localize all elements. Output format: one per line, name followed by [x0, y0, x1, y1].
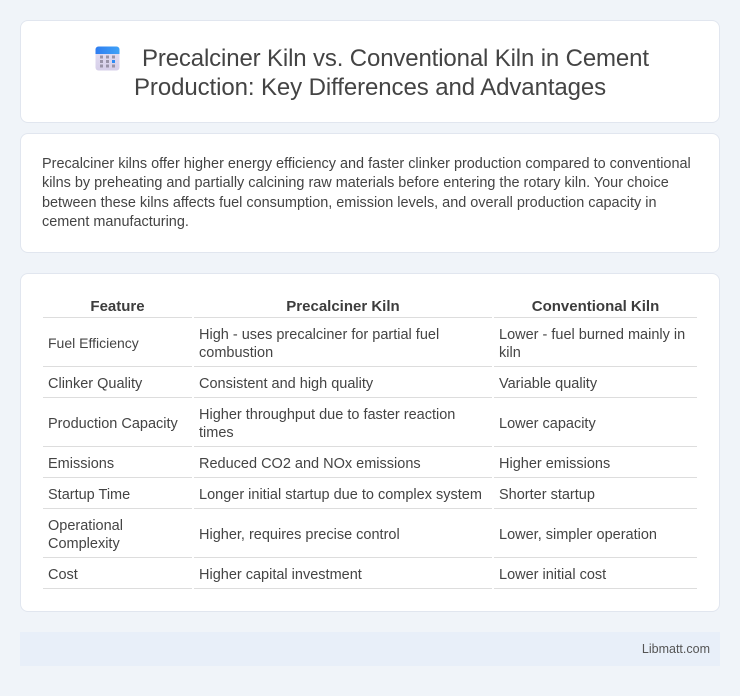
comparison table: Variable quality	[499, 376, 597, 392]
comparison table: Clinker Quality	[48, 376, 142, 392]
comparison table: Feature	[90, 298, 145, 315]
footer credit: Libmatt.com	[642, 642, 710, 656]
comparison table: Higher capital investment	[199, 567, 362, 583]
comparison table: Lower, simpler operation	[499, 527, 657, 543]
comparison table: Longer initial startup due to complex system	[199, 487, 482, 503]
comparison table: Operational	[48, 518, 123, 534]
header card	[20, 20, 720, 123]
intro card	[20, 133, 720, 253]
comparison table: Reduced CO2 and NOx emissions	[199, 456, 421, 472]
intro text: cement manufacturing.	[42, 214, 189, 230]
table card	[20, 273, 720, 612]
comparison table: Conventional Kiln	[532, 298, 659, 315]
intro text	[42, 156, 691, 230]
intro text: kilns by preheating and partially calcining raw materials before entering the rotary kiln. Your choice	[42, 175, 669, 191]
comparison table: Consistent and high quality	[199, 376, 373, 392]
comparison table: Lower - fuel burned mainly in	[499, 327, 685, 343]
comparison table: Emissions	[48, 456, 114, 472]
comparison table: combustion	[199, 345, 273, 361]
comparison table: Higher throughput due to faster reaction	[199, 407, 455, 423]
icon: calendar	[96, 46, 120, 70]
comparison table: kiln	[499, 345, 521, 361]
title	[134, 45, 649, 101]
comparison table: Production Capacity	[48, 416, 178, 432]
footer bar	[20, 632, 720, 666]
intro text: Precalciner kilns offer higher energy efficiency and faster clinker production compared to conventional	[42, 156, 691, 172]
comparison table: times	[199, 425, 234, 441]
comparison table: Startup Time	[48, 487, 130, 503]
comparison table: Cost	[48, 567, 78, 583]
comparison table: Fuel Efficiency	[48, 335, 139, 351]
comparison table	[43, 298, 697, 589]
comparison table: Higher, requires precise control	[199, 527, 400, 543]
comparison table: Complexity	[48, 536, 120, 552]
intro text: between these kilns affects fuel consumption, emission levels, and overall production capacity in	[42, 195, 656, 211]
comparison table: Higher emissions	[499, 456, 610, 472]
comparison table: Precalciner Kiln	[286, 298, 400, 315]
comparison table: Lower capacity	[499, 416, 596, 432]
comparison table: Lower initial cost	[499, 567, 606, 583]
title: Production: Key Differences and Advantages	[134, 74, 606, 101]
comparison table: High - uses precalciner for partial fuel	[199, 327, 439, 343]
title: Precalciner Kiln vs. Conventional Kiln in Cement	[142, 45, 649, 72]
comparison table: Shorter startup	[499, 487, 595, 503]
